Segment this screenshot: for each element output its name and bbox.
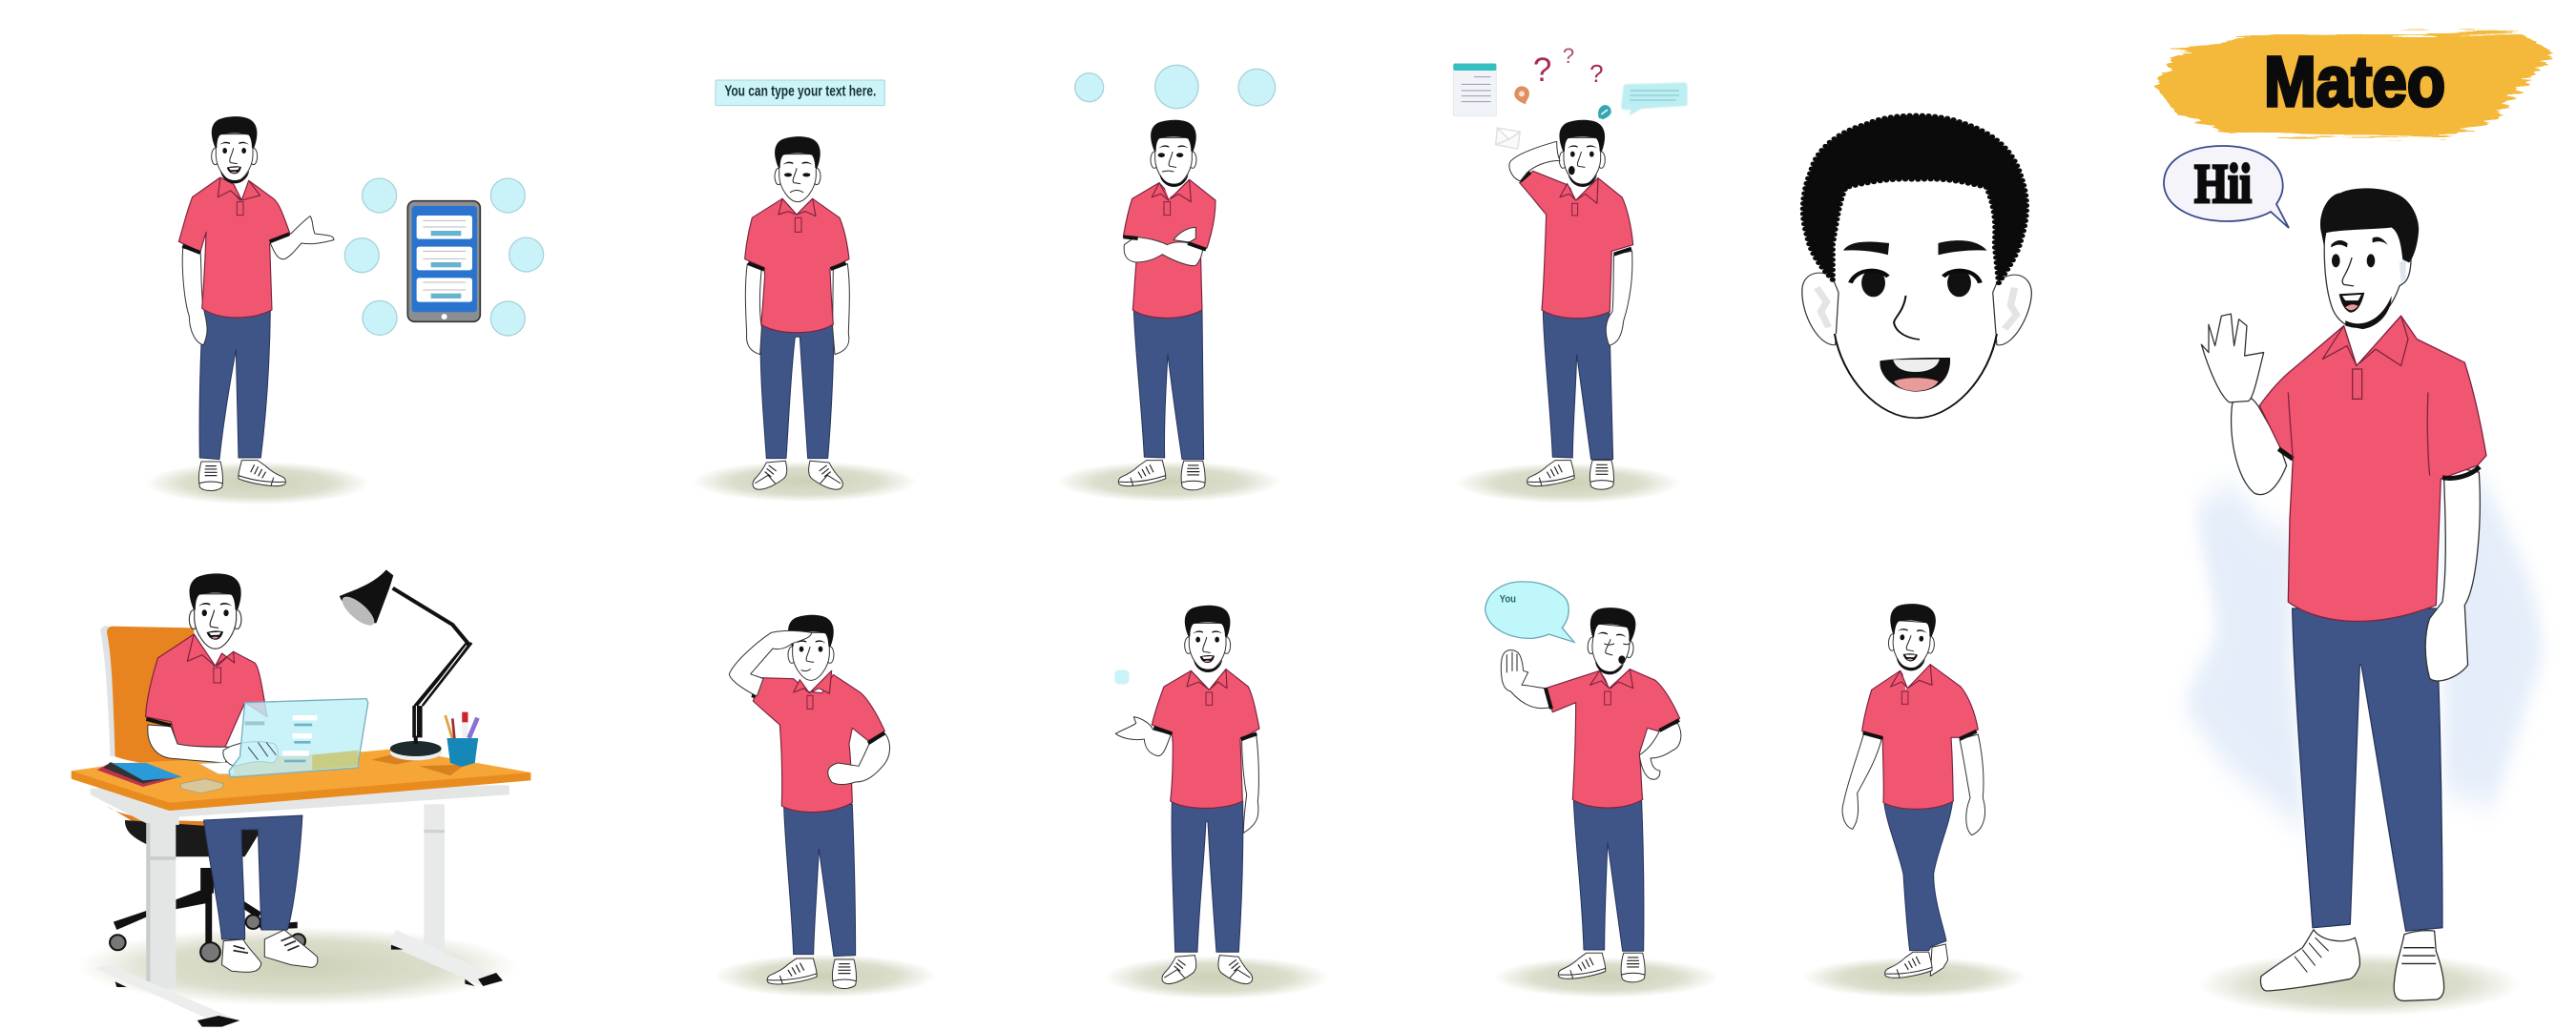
small bubble bbox=[1114, 670, 1129, 684]
ground shadow bbox=[2197, 953, 2522, 1016]
desk bbox=[72, 749, 530, 1027]
figure: Mateo waving bbox=[2182, 188, 2545, 1016]
floor shadow bbox=[77, 927, 517, 1006]
nose bbox=[1894, 296, 1920, 340]
ground shadow bbox=[714, 955, 937, 998]
big face close-up bbox=[1802, 115, 2031, 418]
ground shadow bbox=[1056, 462, 1281, 502]
text label box bbox=[716, 80, 884, 106]
ears bbox=[1802, 273, 2031, 345]
man bbox=[178, 116, 334, 491]
figure: saluting, looking into the distance bbox=[714, 615, 937, 998]
books and box bbox=[97, 762, 223, 793]
figure: man at desk with laptop and lamp bbox=[72, 569, 530, 1027]
figure: presenting with tablet bbox=[145, 116, 544, 505]
ground shadow bbox=[145, 462, 370, 505]
floating icons and question marks: ? bbox=[1563, 44, 1574, 68]
ground shadow bbox=[1455, 463, 1681, 504]
desk lamp bbox=[338, 569, 471, 765]
name banner: Mateo: Mateo bbox=[2264, 42, 2445, 121]
figure: walking bbox=[1801, 602, 2027, 998]
speech bubble: Hii bbox=[2164, 146, 2289, 228]
man bbox=[1509, 120, 1633, 489]
name banner: Mateo bbox=[2156, 32, 2555, 137]
speech bubble: You: You bbox=[1500, 593, 1516, 605]
three circles bbox=[1075, 65, 1276, 109]
floating icons and question marks bbox=[1453, 44, 1687, 149]
tablet with circles bbox=[344, 178, 544, 336]
eyebrows and eyes bbox=[1843, 240, 1987, 297]
legs and shoes bbox=[204, 815, 318, 972]
figure: explaining with open hand bbox=[1104, 606, 1329, 999]
ground shadow bbox=[1493, 958, 1719, 998]
man bbox=[729, 615, 890, 989]
torso and arm bbox=[146, 573, 267, 763]
speech bubble: You bbox=[1485, 582, 1574, 642]
ground shadow bbox=[1801, 958, 2027, 998]
figure: arms crossed with three circles bbox=[1056, 65, 1281, 502]
man bbox=[1115, 606, 1259, 984]
man bbox=[2201, 188, 2486, 1000]
floating icons and question marks: ? bbox=[1589, 59, 1604, 88]
office chair bbox=[100, 626, 305, 961]
laptop and hands bbox=[198, 699, 368, 777]
man bbox=[1501, 606, 1681, 982]
text label box: You can type your text here. bbox=[724, 84, 876, 100]
man bbox=[1842, 602, 1985, 978]
floating icons and question marks: ? bbox=[1533, 52, 1551, 89]
watercolor wash bbox=[2182, 479, 2545, 832]
figure: sad man with text label bbox=[692, 80, 918, 502]
ground shadow bbox=[1104, 956, 1329, 999]
man bbox=[1118, 120, 1215, 490]
ground shadow bbox=[692, 462, 918, 502]
speech bubble: Hii: Hii bbox=[2194, 153, 2252, 215]
figure: confused man with question marks bbox=[1453, 44, 1687, 504]
open mouth bbox=[1880, 358, 1950, 392]
man bbox=[745, 136, 849, 489]
figure: raised palm with speech bubble bbox=[1485, 582, 1719, 998]
pen cup bbox=[419, 712, 478, 775]
face outline bbox=[1835, 334, 1997, 418]
curly hair bbox=[1803, 115, 2026, 283]
